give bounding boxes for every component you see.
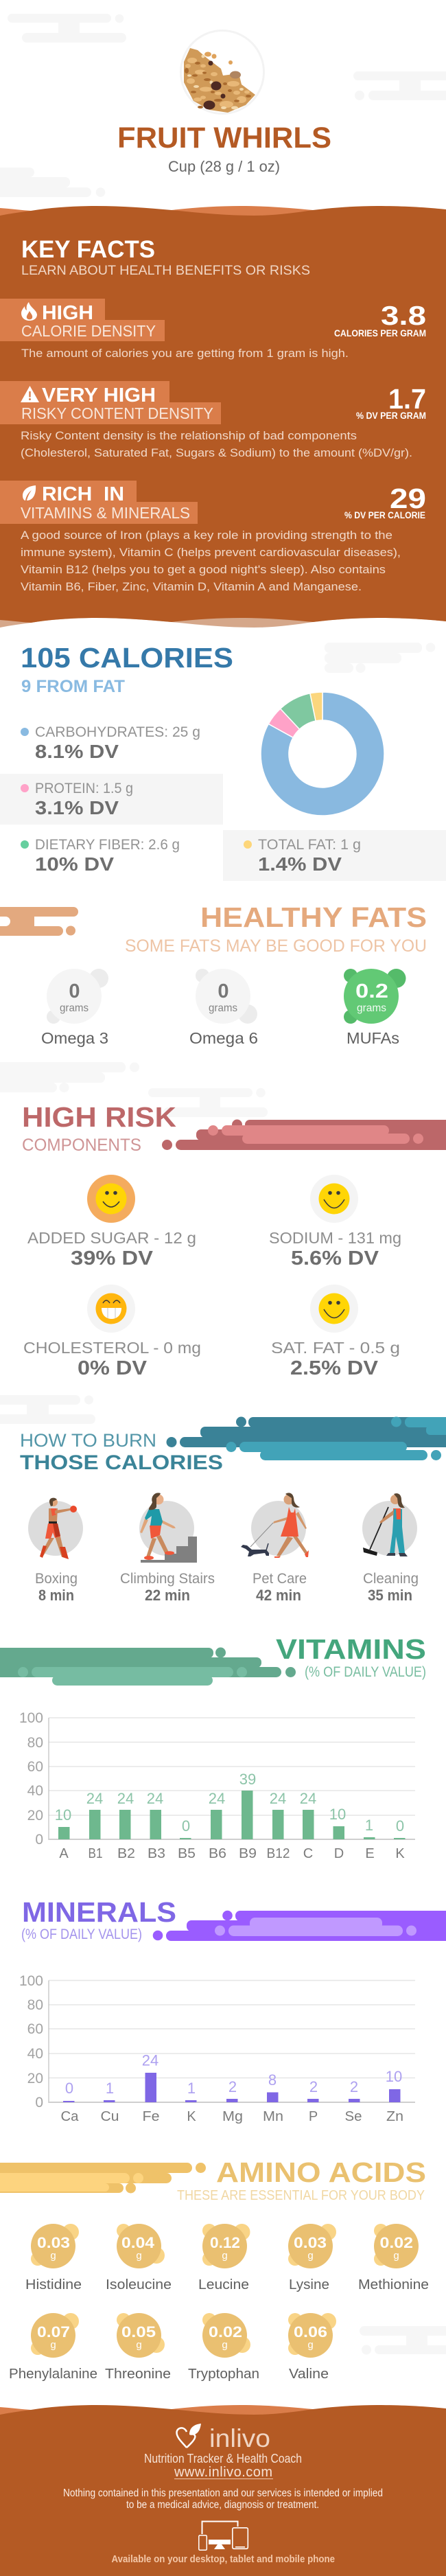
amino acid: methionine: Methionine (358, 2277, 429, 2292)
bar chart: minerals: 8 (268, 2071, 277, 2089)
tag: rich in vitamins and minerals (0, 481, 198, 524)
amino acid: isoleucine: g (136, 2250, 142, 2262)
bar chart: vitamins: B1 (88, 1846, 103, 1861)
activity: boxing: 8 min (38, 1587, 74, 1604)
amino acid: phenylalanine (9, 2313, 97, 2382)
heading: amino acids: AMINO ACIDS (216, 2157, 426, 2188)
disclaimer: Nothing contained in this presentation and our services is intended or implied (63, 2487, 383, 2499)
bar chart: vitamins: 24 (270, 1790, 286, 1807)
amino acid: histidine: g (50, 2250, 56, 2262)
subheading: minerals: (% OF DAILY VALUE) (21, 1927, 142, 1942)
text: vitamins and minerals description: Vitamin B6, Fiber, Zinc, Vitamin D, Vitamin A and Manganese. (21, 580, 362, 593)
tag: very high risky content density (0, 381, 221, 424)
decoration: minerals header shape (153, 1911, 446, 1941)
icon: flame (21, 302, 37, 321)
amino acid: isoleucine (106, 2224, 172, 2292)
amino acid: leucine: g (222, 2250, 228, 2262)
bar chart: minerals: Ca (60, 2109, 79, 2124)
serving size: Cup (28 g / 1 oz) (168, 158, 280, 175)
risk item: sodium: 5.6% DV (291, 1247, 379, 1269)
food photo: granola in a circle (181, 30, 263, 114)
text: calorie density description: The amount of calories you are getting from 1 gram is high. (21, 347, 349, 360)
text: risky content description: (Cholesterol, Saturated Fat, Sugars & Sodium) to the amount (%DV/gr). (21, 446, 412, 459)
tag: high calorie density (0, 299, 165, 341)
bar chart: vitamins: 24 (147, 1790, 163, 1807)
panel: key facts (0, 206, 446, 628)
amino acid: lysine (288, 2224, 336, 2292)
tag: rich in vitamins and minerals: RICH IN (42, 483, 124, 505)
text: vitamins and minerals description: Vitamin B12 (helps you to get a good night's sleep). Also contains (21, 563, 386, 576)
macro: total fat: TOTAL FAT: 1 g (258, 837, 361, 853)
amino acid: tryptophan (188, 2313, 259, 2382)
risk item: saturated fat: SAT. FAT - 0.5 g (271, 1339, 400, 1357)
amino acid: leucine: Leucine (198, 2277, 249, 2292)
amino acid: methionine (358, 2224, 429, 2292)
macro: protein (0, 774, 223, 825)
amino acid: leucine: 0.12 (210, 2234, 240, 2251)
tag: high calorie density: HIGH (42, 302, 93, 324)
decoration: high risk header shape (162, 1119, 446, 1150)
amino acid: lysine: Lysine (289, 2277, 329, 2292)
text: risky content description (21, 429, 412, 459)
bar chart: vitamins: 1 (365, 1817, 373, 1834)
heading: vitamins: VITAMINS (276, 1633, 426, 1665)
amino acid: tryptophan: 0.02 (209, 2323, 242, 2341)
panel: calories (0, 642, 446, 881)
amino acid: isoleucine: Isoleucine (106, 2277, 172, 2292)
activity: cleaning: 35 min (368, 1587, 412, 1604)
fat badge: MUFAs: MUFAs (347, 1029, 399, 1047)
fat badge: omega 6: 0 (218, 980, 229, 1002)
amino acid: tryptophan: g (222, 2339, 228, 2351)
bar chart: minerals: 1 (106, 2080, 114, 2097)
amino acid: valine: 0.06 (294, 2323, 327, 2341)
risk item: saturated fat: 2.5% DV (290, 1357, 379, 1379)
fat badge: MUFAs (344, 969, 406, 1047)
text: risky content description: Risky Content density is the relationship of bad components (21, 429, 357, 442)
disclaimer (63, 2487, 383, 2511)
bar chart: minerals: 1 (187, 2080, 196, 2097)
availability note: Available on your desktop, tablet and mobile phone (111, 2553, 335, 2565)
metric: percent DV per calorie: % DV PER CALORIE (344, 510, 425, 520)
bar chart: minerals: 0 (65, 2080, 73, 2097)
fat badge: omega 3 (41, 969, 108, 1047)
bar chart: vitamins: 10 (55, 1806, 71, 1824)
bar chart: minerals: 100 (19, 1973, 43, 1989)
icon: devices (199, 2521, 248, 2550)
amino acid: leucine (198, 2224, 250, 2292)
subheading: from fat: 9 FROM FAT (21, 677, 125, 696)
bar chart: vitamins: 100 (19, 1710, 43, 1726)
bar chart: vitamins (19, 1710, 415, 1861)
bar chart: minerals: 10 (386, 2068, 402, 2085)
bar chart: minerals: Cu (100, 2109, 119, 2124)
amino acid: lysine: 0.03 (294, 2234, 327, 2251)
subheading: amino acids: THESE ARE ESSENTIAL FOR YOUR BODY (177, 2188, 425, 2203)
bar chart: vitamins: 40 (27, 1783, 43, 1799)
bar chart: minerals: 2 (309, 2078, 318, 2095)
bar chart: vitamins: 39 (239, 1771, 256, 1788)
bar chart: minerals: 24 (142, 2051, 159, 2069)
subheading: components: COMPONENTS (22, 1136, 141, 1155)
risk item: sodium: SODIUM - 131 mg (269, 1229, 401, 1247)
top background clouds (0, 14, 446, 197)
metric: percent DV per gram: % DV PER GRAM (356, 411, 426, 421)
heading: how to burn those calories: THOSE CALORIES (20, 1451, 223, 1474)
bar chart: vitamins: 0 (396, 1817, 404, 1835)
subheading: LEARN ABOUT HEALTH BENEFITS OR RISKS (21, 263, 310, 278)
tag: very high risky content density: RISKY CONTENT DENSITY (21, 404, 213, 422)
text: vitamins and minerals description (21, 529, 401, 593)
risk item: added sugar: ADDED SUGAR - 12 g (27, 1229, 196, 1247)
subheading: vitamins: (% OF DAILY VALUE) (305, 1664, 426, 1680)
fat badge: omega 6: Omega 6 (189, 1029, 258, 1047)
bar chart: minerals: K (187, 2109, 196, 2124)
amino acid: valine: Valine (289, 2367, 329, 2382)
macro: carbohydrates: 8.1% DV (35, 741, 119, 762)
heading: how to burn those calories (20, 1430, 223, 1474)
amino acid: threonine: Threonine (105, 2367, 171, 2382)
icon: leaf (23, 485, 36, 501)
subheading: healthy fats: SOME FATS MAY BE GOOD FOR YOU (125, 936, 427, 956)
decoration: vitamins header shape (0, 1648, 296, 1686)
bar chart: minerals: 80 (27, 1997, 43, 2013)
activity: cleaning (362, 1493, 419, 1604)
bar chart: minerals: Se (344, 2109, 362, 2124)
tag: very high risky content density: VERY HIGH (42, 384, 156, 406)
risk item: cholesterol: CHOLESTEROL - 0 mg (23, 1339, 201, 1357)
activity: climbing stairs (120, 1493, 215, 1604)
activity: climbing stairs: Climbing Stairs (120, 1571, 215, 1587)
amino acid: histidine (25, 2224, 82, 2292)
bar chart: vitamins: B6 (209, 1846, 226, 1861)
bar chart: vitamins: 24 (86, 1790, 103, 1807)
bar chart: vitamins: C (303, 1846, 313, 1861)
amino acid: phenylalanine: g (50, 2339, 56, 2351)
activity: boxing: Boxing (35, 1571, 78, 1587)
text: vitamins and minerals description: immune system), Vitamin C (helps prevent cardiovascular diseases), (21, 546, 401, 559)
risk item: cholesterol: 0% DV (78, 1357, 148, 1379)
metric: percent DV per calorie (344, 483, 426, 520)
bar chart: vitamins: K (395, 1846, 405, 1861)
risk item: sodium (269, 1175, 401, 1269)
text: vitamins and minerals description: A good source of Iron (plays a key role in providing strength to the (21, 529, 392, 542)
bar chart: vitamins: B5 (178, 1846, 196, 1861)
amino acid: threonine: g (136, 2339, 142, 2351)
decoration: burn header shape (166, 1417, 446, 1460)
macro: carbohydrates: CARBOHYDRATES: 25 g (35, 724, 200, 740)
bar chart: vitamins: B12 (266, 1846, 290, 1861)
bar chart: minerals: Zn (386, 2109, 403, 2124)
metric: calories per gram: 3.8 (381, 301, 426, 331)
bar chart: minerals: 2 (350, 2078, 358, 2095)
activity: pet care: 42 min (256, 1587, 301, 1604)
burn background cloud (0, 1395, 95, 1424)
decoration: amino acids header shape (0, 2163, 206, 2193)
bar chart: minerals: P (309, 2109, 318, 2124)
bar chart: minerals: Mg (222, 2109, 243, 2124)
macro: carbohydrates (21, 724, 200, 762)
heading: how to burn those calories: HOW TO BURN (20, 1430, 156, 1451)
bar chart: minerals: 2 (228, 2078, 237, 2095)
website link: www.inlivo.com (174, 2465, 272, 2480)
macro: dietary fiber: DIETARY FIBER: 2.6 g (35, 837, 180, 853)
metric: percent DV per calorie: 29 (390, 483, 426, 514)
risk item: cholesterol (23, 1285, 201, 1379)
bar chart: vitamins: 10 (329, 1806, 346, 1823)
calories background cloud (325, 643, 435, 673)
bar chart: vitamins: 80 (27, 1735, 43, 1751)
amino acid: isoleucine: 0.04 (121, 2234, 155, 2251)
fat badge: MUFAs: 0.2 (355, 980, 388, 1002)
amino acid: histidine: 0.03 (37, 2234, 70, 2251)
bar chart: vitamins: B2 (117, 1846, 135, 1861)
bar chart: minerals (19, 1973, 415, 2124)
bar chart: vitamins: 0 (35, 1832, 43, 1848)
risk item: added sugar (27, 1175, 196, 1269)
title: FRUIT WHIRLS (117, 122, 331, 154)
amino acid: tryptophan: Tryptophan (188, 2367, 259, 2382)
decoration: healthy fats header shape (0, 907, 78, 936)
amino acid: threonine: 0.05 (121, 2323, 156, 2341)
icon: inlivo heart logo (177, 2424, 201, 2448)
fat badge: omega 6 (189, 969, 258, 1047)
macro: total fat: 1.4% DV (258, 853, 342, 875)
heading: calories: 105 CALORIES (21, 642, 233, 674)
fat badge: omega 3: Omega 3 (41, 1029, 108, 1047)
bar chart: vitamins: 20 (27, 1808, 43, 1824)
bar chart: vitamins: 24 (209, 1790, 225, 1807)
amino acid: phenylalanine: 0.07 (37, 2323, 70, 2341)
heading: key facts: KEY FACTS (21, 236, 155, 263)
fat badge: MUFAs: grams (357, 1002, 386, 1014)
bar chart: minerals: 0 (35, 2095, 43, 2111)
disclaimer: to be a medical advice, diagnosis or treatment. (126, 2499, 319, 2511)
amino acid: methionine: g (393, 2250, 399, 2262)
risk item: saturated fat (271, 1285, 400, 1379)
bar chart: vitamins: 60 (27, 1759, 43, 1775)
metric: calories per gram: CALORIES PER GRAM (334, 328, 426, 338)
amino acid: valine (288, 2313, 336, 2382)
bottom right background cloud (360, 2326, 446, 2355)
bar chart: vitamins: E (365, 1846, 375, 1861)
bar chart: vitamins: A (59, 1846, 69, 1861)
activity: cleaning: Cleaning (363, 1571, 419, 1587)
donut chart (261, 692, 384, 816)
bar chart: vitamins: D (334, 1846, 344, 1861)
metric: calories per gram (334, 301, 426, 338)
tag: rich in vitamins and minerals: VITAMINS & MINERALS (21, 504, 190, 522)
bar chart: vitamins: 24 (300, 1790, 316, 1807)
heading: minerals: MINERALS (22, 1896, 176, 1928)
bar chart: vitamins: B3 (148, 1846, 165, 1861)
fat badge: omega 6: grams (209, 1002, 237, 1014)
panel: footer (0, 2405, 446, 2576)
activity: pet care (241, 1493, 309, 1604)
activity: pet care: Pet Care (253, 1571, 307, 1587)
activity: climbing stairs: 22 min (145, 1587, 190, 1604)
bar chart: minerals: Fe (143, 2109, 159, 2124)
macro: protein: 3.1% DV (35, 797, 119, 818)
bar chart: vitamins: 0 (182, 1817, 190, 1835)
macro: protein: PROTEIN: 1.5 g (35, 781, 133, 796)
amino acid: histidine: Histidine (25, 2277, 82, 2292)
tagline: Nutrition Tracker & Health Coach (144, 2452, 302, 2465)
bar chart: minerals: 20 (27, 2071, 43, 2086)
amino acid: lysine: g (307, 2250, 314, 2262)
macro: dietary fiber (21, 837, 180, 875)
amino acid: valine: g (307, 2339, 314, 2351)
heading: high risk: HIGH RISK (22, 1101, 176, 1133)
amino acid: phenylalanine: Phenylalanine (9, 2367, 97, 2382)
amino acid: threonine (105, 2313, 171, 2382)
fat badge: omega 3: grams (60, 1002, 89, 1014)
macro: total fat (223, 830, 446, 881)
bar chart: minerals: 60 (27, 2021, 43, 2037)
risk item: added sugar: 39% DV (71, 1247, 154, 1269)
fat badge: omega 3: 0 (69, 980, 80, 1002)
heading: healthy fats: HEALTHY FATS (200, 901, 427, 933)
amino acid: methionine: 0.02 (380, 2234, 413, 2251)
icon: warning triangle (21, 386, 39, 402)
metric: percent DV per gram: 1.7 (388, 383, 426, 415)
bar chart: minerals: Mn (263, 2109, 283, 2124)
macro: dietary fiber: 10% DV (35, 853, 114, 875)
metric: percent DV per gram (356, 383, 426, 421)
tag: high calorie density: CALORIE DENSITY (21, 322, 156, 340)
bar chart: minerals: 40 (27, 2046, 43, 2062)
bar chart: vitamins: 24 (117, 1790, 134, 1807)
bar chart: vitamins: B9 (239, 1846, 257, 1861)
high risk background clouds (0, 1062, 268, 1117)
brand name: inlivo (209, 2424, 270, 2452)
activity: boxing (28, 1498, 83, 1604)
